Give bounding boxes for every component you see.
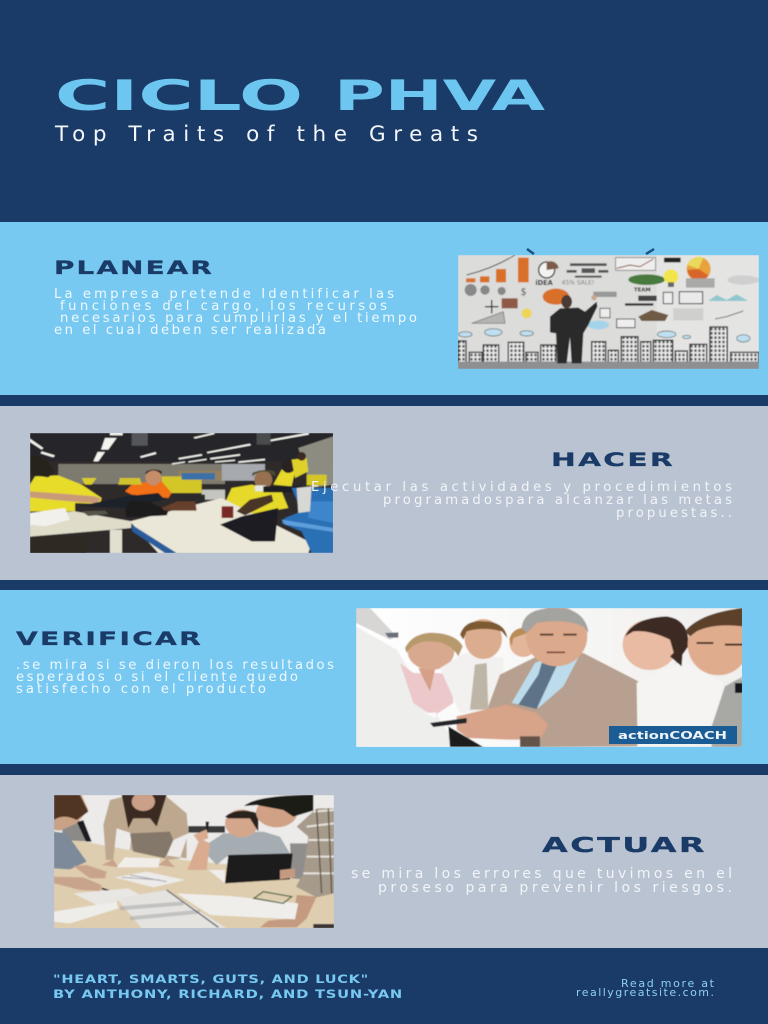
text: planear body <box>54 287 417 338</box>
woman right <box>636 682 639 726</box>
text: verificar body: satisfecho con el producto <box>16 682 266 697</box>
blue machine <box>282 488 333 553</box>
standing woman <box>103 797 188 860</box>
central man <box>488 653 638 747</box>
panel: verificar <box>0 590 768 764</box>
left man <box>54 795 88 831</box>
hand <box>457 705 548 740</box>
text: verificar body <box>16 658 334 697</box>
text: planear body: en el cual deben ser realizada <box>54 323 326 338</box>
text: planear body: necesarios para cumplirlas y el tiempo <box>60 311 417 326</box>
blonde woman <box>400 663 453 716</box>
papers <box>115 872 185 887</box>
workers <box>30 475 102 511</box>
photo: business man drawing on wall: 45% SALE! <box>562 279 594 286</box>
man right <box>296 808 334 897</box>
text: hacer body <box>311 480 732 521</box>
woman behind <box>508 627 532 658</box>
text: verificar body: .se mira si se dieron los resultados <box>16 658 334 673</box>
photo: team meeting <box>356 606 749 747</box>
divider band <box>0 395 768 406</box>
title: CICLO <box>55 71 303 120</box>
footer band <box>0 948 768 1024</box>
text: hacer body: programadospara alcanzar las metas <box>383 493 732 508</box>
divider band <box>0 580 768 590</box>
text: planear body: La empresa pretende Identificar las <box>54 287 394 302</box>
text: read more: Read more at <box>621 977 715 990</box>
photo: business man drawing on wall: TEAM <box>634 288 651 294</box>
text: read more <box>576 977 715 999</box>
text: book credit: "HEART, SMARTS, GUTS, AND LUCK" <box>53 972 369 986</box>
icon: marks above photo <box>527 249 654 254</box>
photo: people around a table <box>54 792 334 928</box>
photo: shoe factory <box>30 433 333 553</box>
divider band <box>0 764 768 775</box>
laptop <box>225 853 293 883</box>
logo: actionCOACH: actionCOACH <box>618 730 727 742</box>
chairs <box>62 820 92 842</box>
panel: planear <box>0 222 768 395</box>
text: book credit <box>53 972 403 1001</box>
text: read more: reallygreatsite.com. <box>576 986 714 999</box>
text: planear body: funciones del cargo, los recursos <box>60 299 387 314</box>
table <box>54 838 334 928</box>
man right <box>712 676 743 747</box>
heading: actuar: ACTUAR <box>542 833 707 857</box>
heading: hacer: HACER <box>551 449 675 471</box>
text: actuar body: se mira los errores que tuvimos en el <box>351 866 732 882</box>
text: actuar body: proseso para prevenir los riesgos. <box>378 880 732 896</box>
text: verificar body: esperados o si el cliente quedo <box>16 670 298 685</box>
photo: business man drawing on wall: $ <box>521 287 527 298</box>
subtitle: Top Traits of the Greats <box>54 122 478 147</box>
figure <box>550 302 597 363</box>
heading: planear: PLANEAR <box>54 257 214 279</box>
text: actuar body <box>351 866 732 896</box>
text: book credit: BY ANTHONY, RICHARD, AND TSUN-YAN <box>53 987 403 1001</box>
photo: business man drawing on wall: iDEA <box>535 279 554 287</box>
seated woman <box>201 832 290 865</box>
photo: business man drawing on wall <box>458 255 759 369</box>
title: PHVA <box>334 71 546 120</box>
header band <box>0 0 768 222</box>
text: hacer body: Ejecutar las actividades y procedimientos <box>311 480 732 495</box>
table <box>130 498 312 553</box>
heading: verificar: VERIFICAR <box>16 629 203 650</box>
title <box>55 71 546 120</box>
logo: actionCOACH <box>609 726 737 744</box>
panel: actuar <box>0 775 768 948</box>
shoes <box>125 501 168 517</box>
man behind <box>440 653 503 713</box>
panel: hacer <box>0 406 768 580</box>
text: hacer body: propuestas.. <box>616 506 732 521</box>
